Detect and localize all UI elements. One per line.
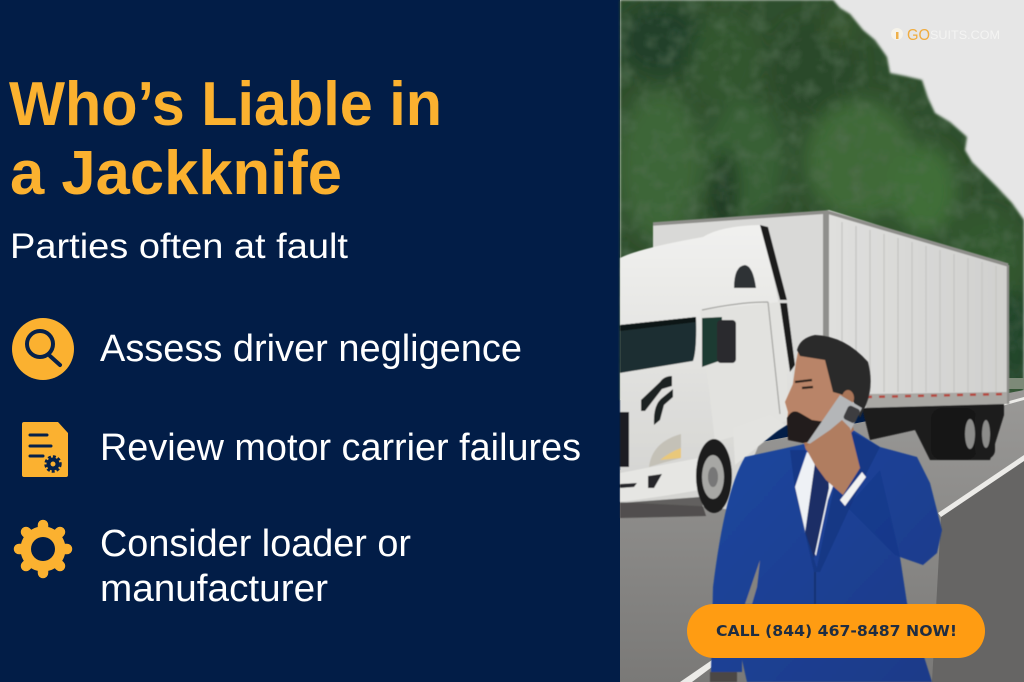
icon: document with gear (22, 422, 68, 477)
front wheel (696, 439, 732, 513)
step (733, 415, 785, 465)
trailer ribs (842, 222, 996, 392)
road (620, 390, 1024, 682)
trailer side (823, 210, 1008, 408)
bumper (620, 458, 700, 502)
hair (797, 335, 871, 418)
road edge line (680, 397, 1024, 682)
neck (803, 405, 854, 458)
watch (710, 672, 737, 682)
hand (805, 420, 860, 495)
sky (620, 0, 1024, 400)
door panel shading (700, 302, 790, 442)
trailer front face (653, 211, 827, 410)
tie (805, 463, 829, 558)
semi truck (620, 210, 1008, 518)
shirt (795, 452, 836, 556)
text: consider loader or manufacturer: manufacturer (100, 568, 328, 610)
mirror (717, 320, 736, 363)
ear (842, 390, 854, 406)
icon: gear (19, 525, 67, 573)
windshield (620, 317, 696, 373)
title (9, 70, 442, 208)
beard (787, 411, 838, 443)
subtitle: Parties often at fault (10, 227, 348, 266)
call to action button: CALL (844) 467-8487 NOW! (716, 622, 957, 640)
watermark logo (891, 27, 1000, 44)
shirt cuff (840, 472, 866, 506)
headlight (649, 434, 681, 467)
man in blue suit on phone (710, 335, 942, 682)
photo: truck on highway with lawyer (618, 0, 1024, 682)
undercarriage and wheels (862, 404, 1004, 460)
arm seam shading (847, 470, 900, 557)
distant guard rail (1008, 378, 1024, 389)
text: consider loader or manufacturer (100, 523, 411, 610)
tree line (618, 0, 1024, 400)
sleeper window (734, 265, 756, 288)
panel: navy text panel (0, 0, 620, 682)
watermark logo: SUITS.COM (930, 28, 1000, 42)
icon: magnifying glass (12, 318, 74, 380)
title: a Jackknife (10, 139, 342, 208)
title: Who’s Liable in (9, 70, 442, 139)
grille (620, 412, 629, 467)
cab door line (702, 302, 780, 414)
watermark logo: GO (907, 27, 930, 44)
list item: assess driver negligence (12, 318, 522, 380)
side window (702, 317, 722, 367)
text: assess driver negligence: Assess driver negligence (100, 328, 522, 370)
eye and brow (795, 380, 813, 388)
suit jacket (711, 430, 942, 682)
gap between arm and torso (745, 560, 760, 604)
list item: review motor carrier failures (22, 422, 581, 477)
logo mark (641, 376, 673, 425)
trailer rail (866, 392, 1007, 408)
cab body (620, 225, 795, 510)
call to action button (687, 604, 985, 658)
road shoulder (932, 461, 1024, 682)
phone (807, 395, 862, 447)
lapels (790, 432, 880, 572)
face (785, 350, 852, 445)
list item: consider loader or manufacturer (19, 523, 411, 610)
cab dark stripe (760, 225, 795, 372)
text: review motor carrier failures: Review motor carrier failures (100, 427, 581, 469)
text: consider loader or manufacturer: Consider loader or (100, 523, 411, 565)
shadow under truck (620, 497, 706, 518)
